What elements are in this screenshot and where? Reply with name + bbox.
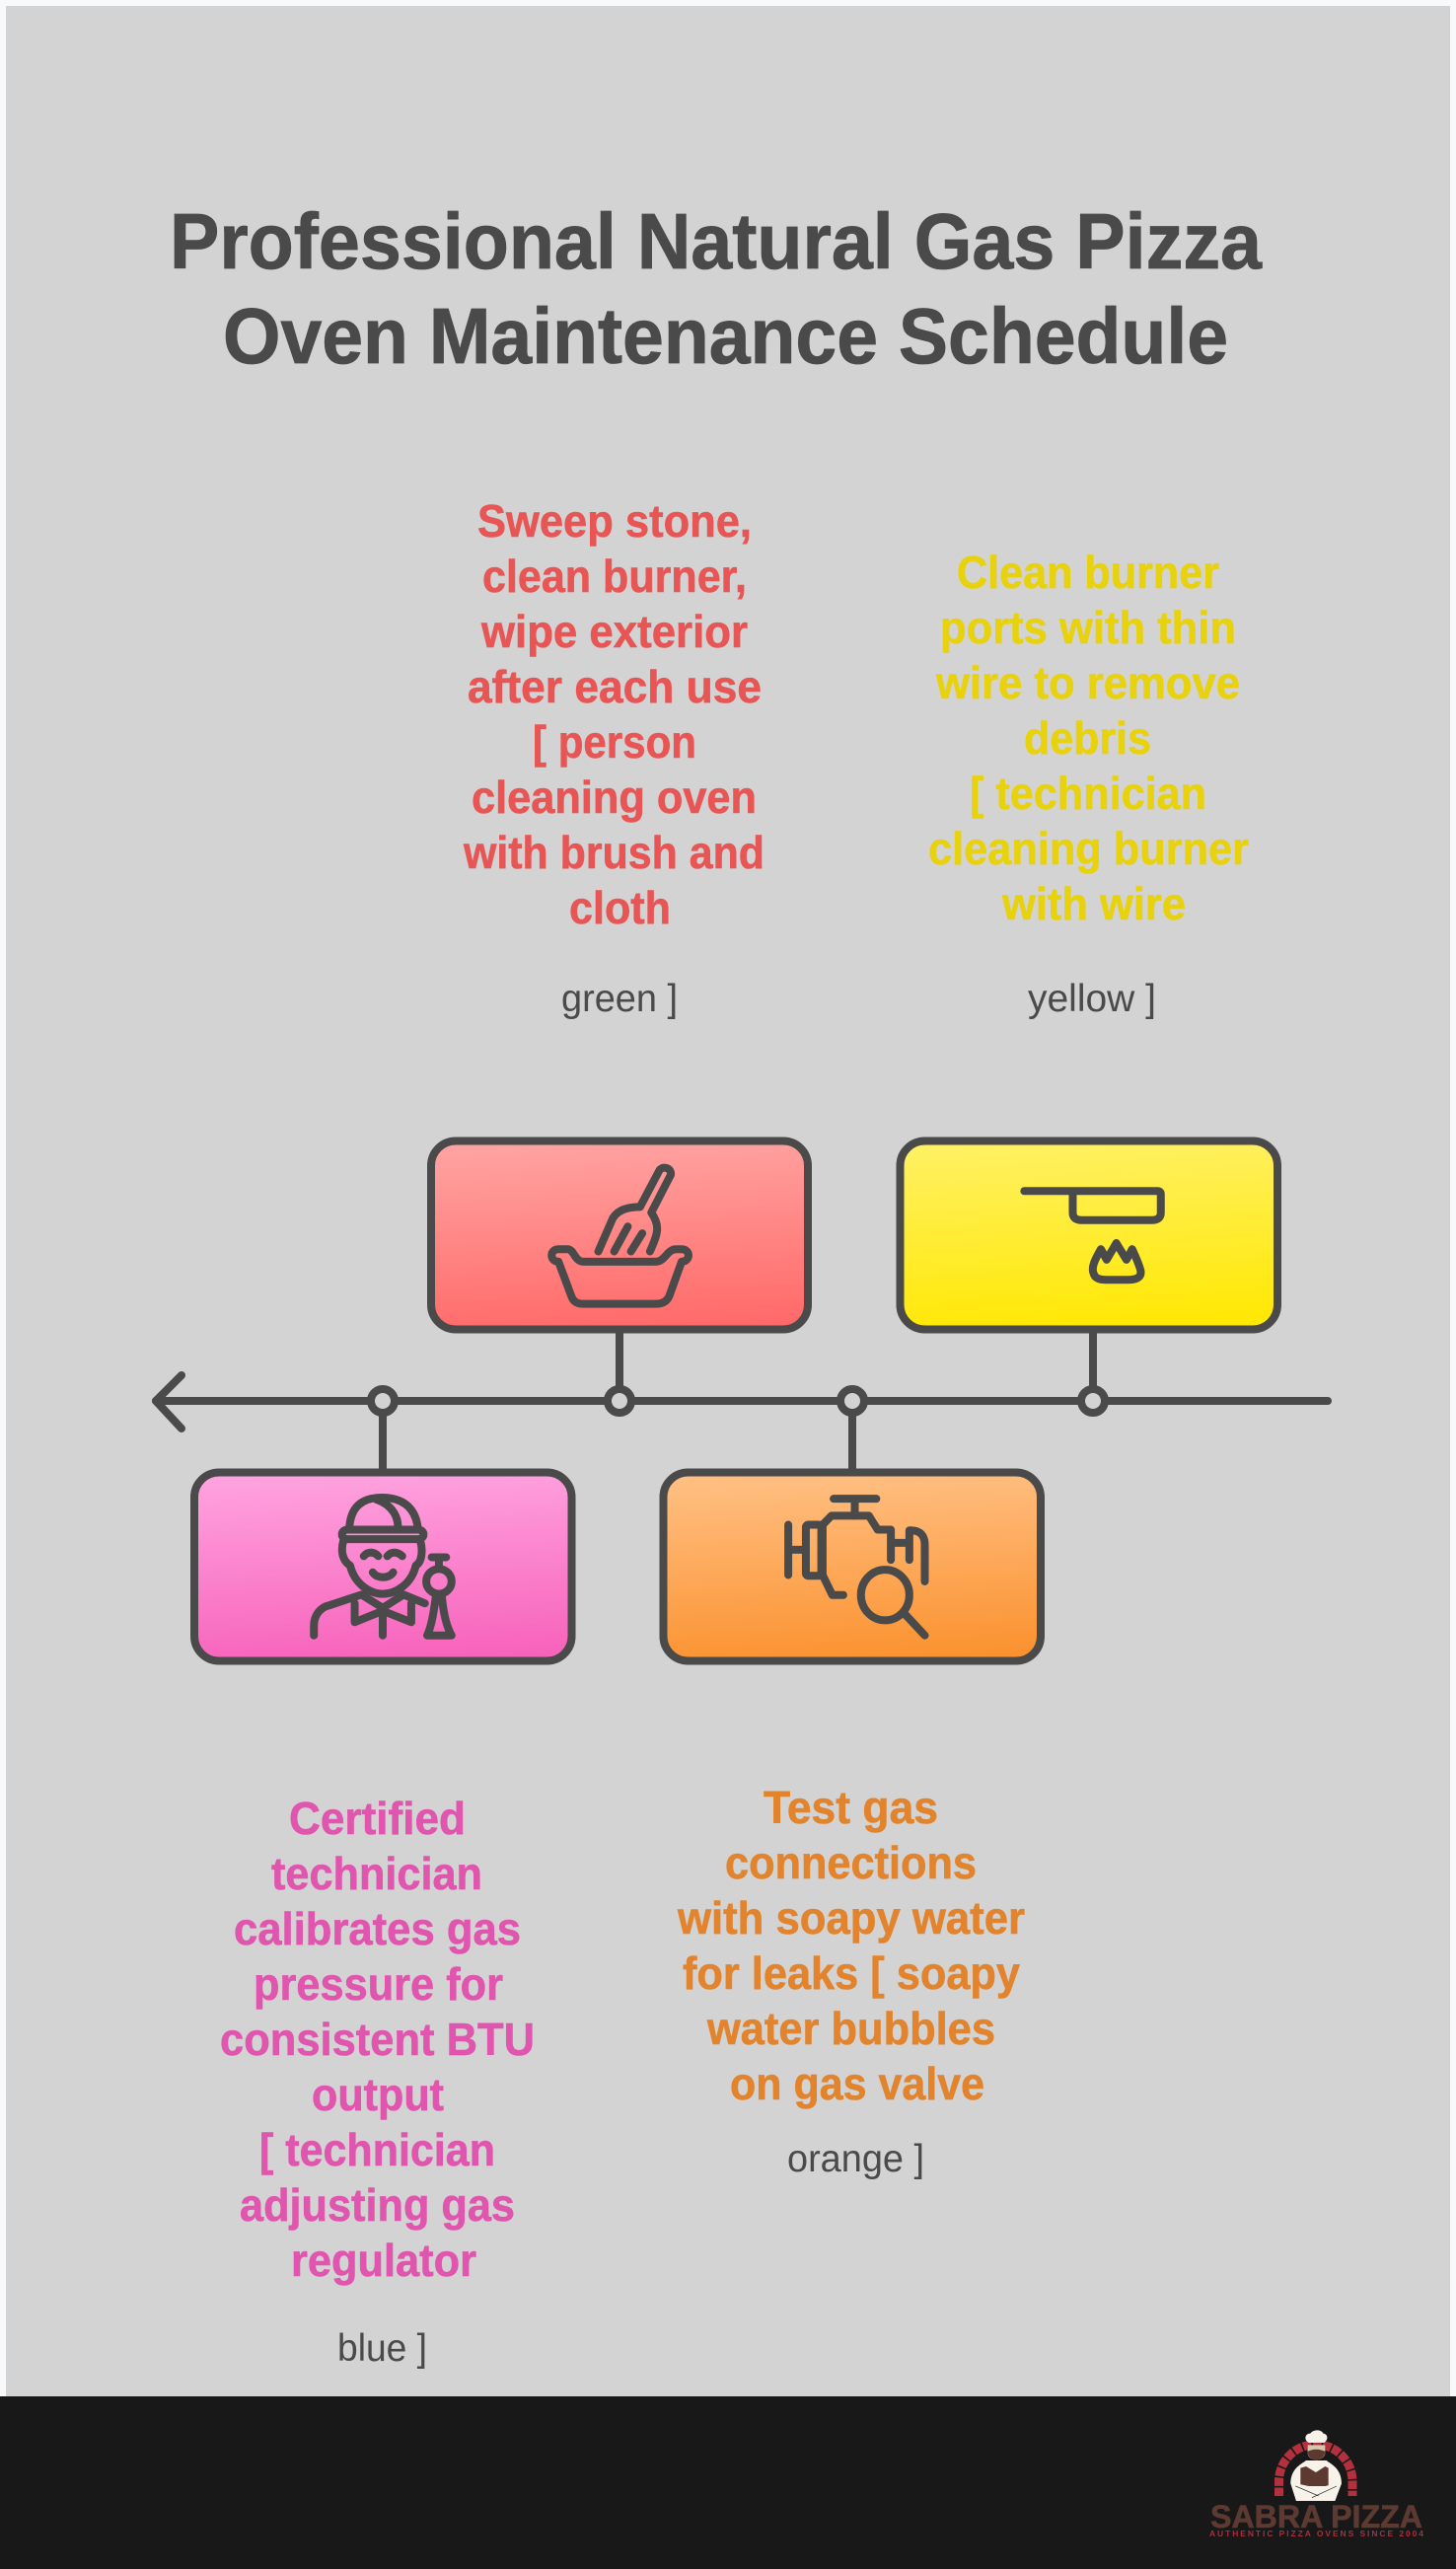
- icon: technician with regulator: [314, 1498, 452, 1636]
- logo tagline: AUTHENTIC PIZZA OVENS SINCE 2004: [1209, 2529, 1423, 2538]
- icon: gas valve and magnifier: [788, 1499, 924, 1636]
- text block: daily cleaning (red): green ]: [561, 978, 678, 1020]
- icon: burner and flame: [1024, 1191, 1161, 1280]
- card: orange valve inspection icon: [663, 1472, 1041, 1661]
- text block: daily cleaning (red): cloth: [569, 882, 671, 933]
- text block: leak test (orange): orange ]: [787, 2138, 924, 2180]
- footer bar: [0, 2396, 1456, 2569]
- text block: daily cleaning (red): with brush and: [463, 827, 764, 878]
- timeline with arrow: [156, 1332, 1328, 1470]
- title: Oven Maintenance Schedule: [223, 292, 1228, 380]
- logo chef: [1290, 2430, 1342, 2501]
- card: yellow burner icon: [900, 1140, 1277, 1330]
- title: [170, 197, 1262, 380]
- text block: gas calibration (pink): blue ]: [337, 2327, 427, 2370]
- card: pink technician icon: [194, 1472, 572, 1661]
- text block: gas calibration (pink): Certified: [289, 1793, 466, 1844]
- title: Professional Natural Gas Pizza: [170, 197, 1262, 285]
- text block: burner port cleaning (yellow): with wire: [1001, 878, 1186, 929]
- text block: leak test (orange): Test gas: [764, 1782, 938, 1833]
- text block: gas calibration (pink): consistent BTU: [220, 2014, 535, 2065]
- logo wordmark: SABRA PIZZA: [1210, 2499, 1422, 2534]
- text block: leak test (orange): on gas valve: [730, 2058, 984, 2109]
- text block: burner port cleaning (yellow): yellow ]: [1028, 978, 1156, 1020]
- icon: brush and basket: [551, 1168, 689, 1304]
- text block: gas calibration (pink): calibrates gas: [234, 1903, 521, 1954]
- text block: burner port cleaning (yellow): [928, 547, 1249, 1020]
- text block: leak test (orange): with soapy water: [677, 1892, 1025, 1944]
- text block: gas calibration (pink): [220, 1793, 535, 2370]
- text block: gas calibration (pink): adjusting gas: [240, 2179, 515, 2231]
- text block: leak test (orange): connections: [725, 1837, 977, 1888]
- text block: gas calibration (pink): technician: [271, 1848, 482, 1899]
- text block: daily cleaning (red): Sweep stone,: [477, 495, 752, 547]
- text block: burner port cleaning (yellow): Clean burner: [957, 547, 1219, 598]
- text block: daily cleaning (red): after each use: [468, 661, 762, 712]
- text block: burner port cleaning (yellow): cleaning burner: [928, 823, 1249, 874]
- card: red cleaning icon: [431, 1140, 808, 1330]
- text block: gas calibration (pink): regulator: [291, 2235, 476, 2286]
- text block: daily cleaning (red): cleaning oven: [472, 771, 757, 823]
- text block: burner port cleaning (yellow): debris: [1024, 712, 1151, 764]
- text block: leak test (orange): water bubbles: [706, 2003, 995, 2054]
- arrow head: [156, 1375, 182, 1429]
- text block: daily cleaning (red): clean burner,: [482, 550, 747, 602]
- text block: burner port cleaning (yellow): wire to remove: [935, 657, 1240, 708]
- text block: gas calibration (pink): pressure for: [254, 1958, 503, 2010]
- timeline markers: [371, 1389, 1105, 1413]
- text block: leak test (orange): [677, 1782, 1025, 2180]
- text block: daily cleaning (red): [ person: [533, 716, 696, 768]
- text block: gas calibration (pink): output: [312, 2069, 444, 2120]
- text block: daily cleaning (red): [463, 495, 764, 1020]
- text block: daily cleaning (red): wipe exterior: [480, 606, 748, 657]
- text block: gas calibration (pink): [ technician: [259, 2124, 495, 2175]
- footer logo: Sabra Pizza: [1209, 2430, 1423, 2538]
- text block: leak test (orange): for leaks [ soapy: [683, 1947, 1020, 1999]
- connectors: [383, 1332, 1093, 1470]
- text block: burner port cleaning (yellow): ports with thin: [940, 602, 1236, 653]
- text block: burner port cleaning (yellow): [ technician: [970, 768, 1206, 819]
- logo brick arch: [1278, 2445, 1352, 2496]
